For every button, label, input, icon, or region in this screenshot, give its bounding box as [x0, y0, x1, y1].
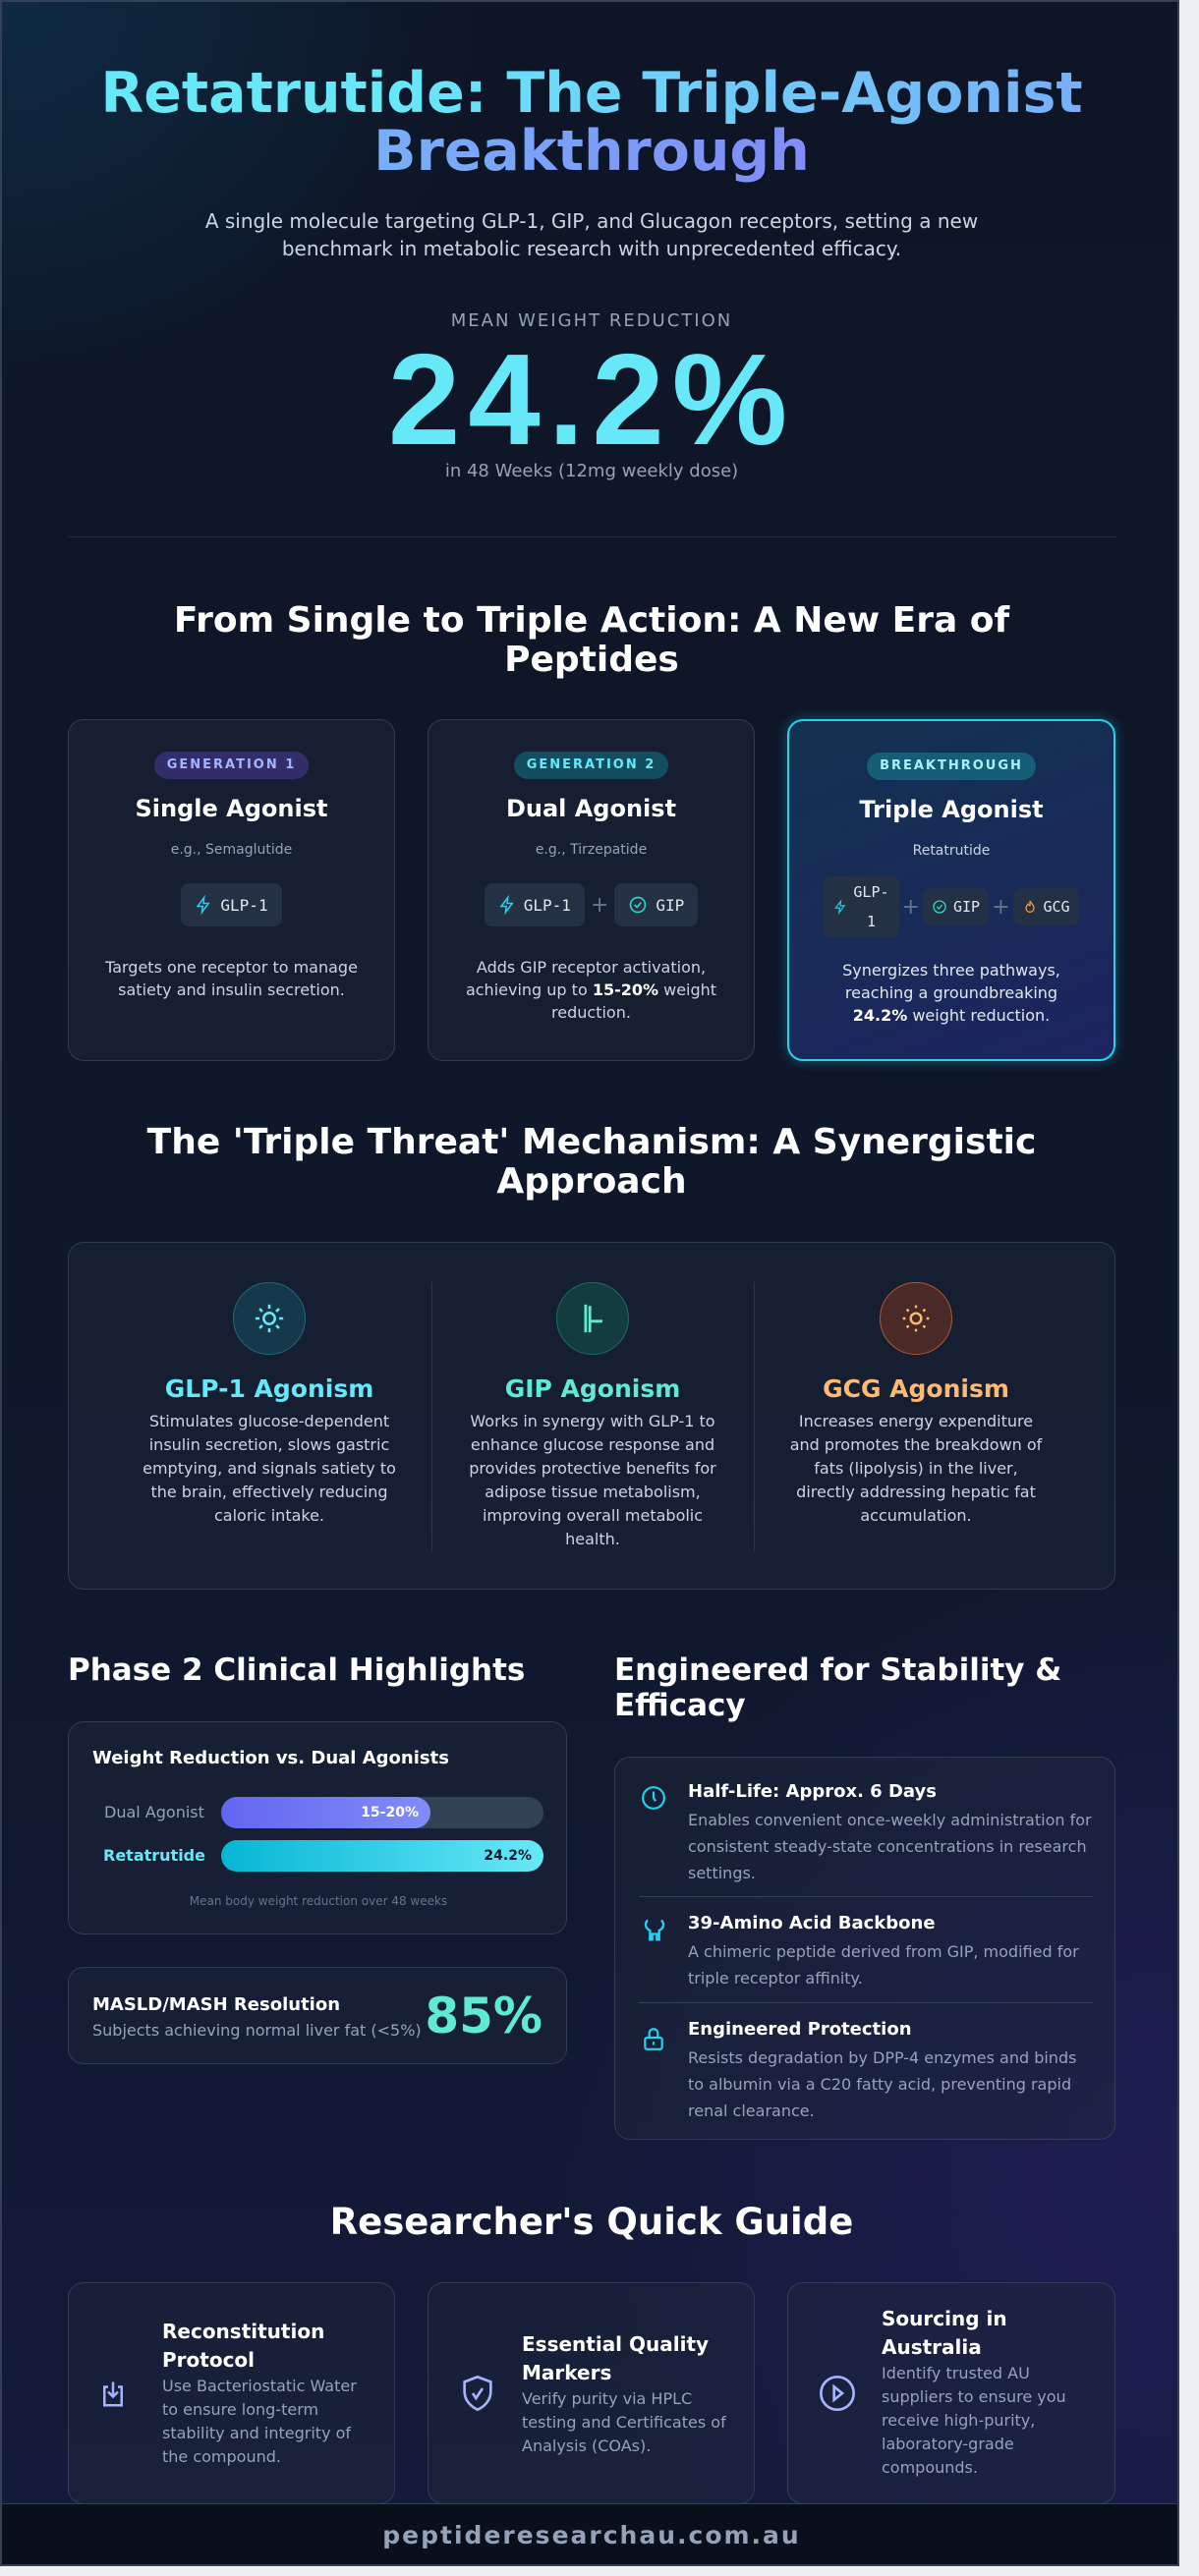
column: GCG agonism: [790, 1282, 1043, 1525]
card: generation 2: Dual Agonist: [506, 795, 676, 822]
heading: single to triple: From Single to Triple Action: A New Era of Peptides: [174, 600, 1009, 680]
icon: shield: [463, 2376, 492, 2411]
chart card: weight reduction: [68, 1721, 567, 1934]
icon: download: [103, 2381, 123, 2407]
card: generation 1: GLP-1: [220, 896, 268, 914]
icon: glp-1: [233, 1282, 306, 1355]
guide card: sourcing: Sourcing in Australia: [882, 2307, 1007, 2359]
guide card: quality: [428, 2282, 755, 2504]
guide card: quality: Verify purity via HPLC testing and Certificates of Analysis (COAs).: [522, 2389, 726, 2455]
column: GIP agonism: [469, 1282, 716, 1548]
bar: retatrutide: Retatrutide: [103, 1846, 205, 1865]
item: backbone: A chimeric peptide derived from GIP, modified for triple receptor affinity.: [688, 1942, 1079, 1988]
stat card: MASLD: Subjects achieving normal liver fat (<5%): [92, 2021, 422, 2040]
bar: dual agonist: [104, 1797, 543, 1828]
bar: dual agonist: 15-20%: [361, 1805, 419, 1820]
card: generation 1: e.g., Semaglutide: [171, 842, 292, 858]
stat card: MASLD: [68, 1967, 567, 2064]
panel: engineered features: [614, 1757, 1115, 2140]
heading: phase 2: Phase 2 Clinical Highlights: [68, 1652, 525, 1688]
item: backbone: 39-Amino Acid Backbone: [688, 1913, 936, 1933]
column: GLP-1 agonism: [143, 1282, 396, 1525]
card: generation 2: GIP: [656, 896, 684, 914]
icon: gip: [556, 1282, 629, 1355]
heading: quick guide: Researcher's Quick Guide: [330, 2201, 853, 2243]
guide card: sourcing: Identify trusted AU suppliers to ensure you receive high-purity, laboratory-grade compounds.: [882, 2364, 1066, 2477]
item: protection: Resists degradation by DPP-4 enzymes and binds to albumin via a C20 fatty acid, preventing rapid renal clearance.: [688, 2048, 1076, 2120]
bar: retatrutide: 24.2%: [484, 1848, 532, 1864]
column: GCG agonism: Increases energy expenditure and promotes the breakdown of fats (lipolysis) in the liver, directly addressing hepatic fat accumulation.: [790, 1412, 1042, 1525]
panel: mechanism: [68, 1242, 1115, 1590]
title: Retatrutide: The Triple-Agonist: [100, 61, 1083, 126]
column: GIP agonism: GIP Agonism: [505, 1374, 680, 1403]
item: backbone: [645, 1913, 1079, 1988]
card: generation 1: GENERATION 1: [167, 757, 296, 772]
card: generation 1: Single Agonist: [136, 795, 327, 822]
icon: play: [820, 2376, 855, 2411]
card: generation 2: Adds GIP receptor activation, achieving up to 15-20% weight reduction.: [466, 958, 716, 1022]
guide card: reconstitution: Use Bacteriostatic Water to ensure long-term stability and integrity of the compound.: [162, 2377, 357, 2466]
title: Breakthrough: [373, 119, 810, 184]
card: breakthrough: GLP-: [853, 883, 889, 901]
card: breakthrough: GIP: [953, 898, 980, 916]
subtitle: A single molecule targeting GLP-1, GIP, and Glucagon receptors, setting a new benchmark in metabolic research with unprecedented efficacy.: [205, 209, 978, 260]
card: generation 2: +: [591, 892, 608, 918]
card: generation 1: [68, 719, 395, 1061]
bar: retatrutide: [103, 1840, 543, 1872]
guide card: quality: Essential Quality Markers: [522, 2332, 709, 2384]
stat card: MASLD: 85%: [425, 1988, 542, 2044]
item: half-life: Enables convenient once-weekly administration for consistent steady-state concentrations in research settings.: [688, 1811, 1092, 1882]
card: generation 2: GENERATION 2: [527, 757, 656, 772]
item: protection: Engineered Protection: [688, 2019, 912, 2040]
guide card: reconstitution: Reconstitution Protocol: [162, 2320, 324, 2372]
item: half-life: [642, 1781, 1092, 1882]
footer: peptideresearchau.com.au: [382, 2521, 801, 2549]
card: breakthrough: GCG: [1044, 898, 1070, 916]
guide card: reconstitution: [68, 2282, 395, 2504]
footer: [2, 2503, 1181, 2568]
card: breakthrough: Retatrutide: [913, 843, 990, 859]
column: GLP-1 agonism: GLP-1 Agonism: [165, 1374, 373, 1403]
column: GLP-1 agonism: Stimulates glucose-dependent insulin secretion, slows gastric emptying, and signals satiety to the brain, effectively reducing caloric intake.: [143, 1412, 396, 1525]
icon: gcg: [880, 1282, 952, 1355]
hero stat: in 48 Weeks (12mg weekly dose): [445, 461, 738, 481]
card: generation 1: Targets one receptor to manage satiety and insulin secretion.: [105, 958, 358, 999]
bar: dual agonist: Dual Agonist: [104, 1803, 204, 1821]
card: breakthrough: +: [992, 894, 1010, 920]
chart card: weight reduction: Weight Reduction vs. Dual Agonists: [92, 1748, 449, 1768]
card: generation 2: e.g., Tirzepatide: [536, 842, 647, 858]
item: half-life: Half-Life: Approx. 6 Days: [688, 1781, 937, 1802]
item: protection: [644, 2019, 1076, 2120]
column: GIP agonism: Works in synergy with GLP-1 to enhance glucose response and provides protective benefits for adipose tissue metabolism, improving overall metabolic health.: [469, 1412, 716, 1548]
stat card: MASLD: MASLD/MASH Resolution: [92, 1994, 340, 2015]
card: breakthrough: 1: [867, 913, 876, 930]
card: breakthrough: +: [902, 894, 920, 920]
card: generation 2: GLP-1: [524, 896, 571, 914]
card: breakthrough: BREAKTHROUGH: [880, 758, 1023, 773]
title: [100, 61, 1083, 184]
column: GCG agonism: GCG Agonism: [823, 1374, 1009, 1403]
heading: mechanism: The 'Triple Threat' Mechanism: A Synergistic Approach: [147, 1122, 1036, 1202]
chart card: weight reduction: Mean body weight reduction over 48 weeks: [190, 1894, 447, 1908]
card: generation 2: [428, 719, 755, 1061]
hero stat: MEAN WEIGHT REDUCTION: [451, 310, 732, 331]
heading: engineered: Engineered for Stability & Efficacy: [614, 1652, 1061, 1723]
card: breakthrough: [787, 719, 1115, 1061]
card: breakthrough: Synergizes three pathways, reaching a groundbreaking 24.2% weight reduction.: [842, 961, 1060, 1025]
guide card: sourcing: [787, 2282, 1115, 2504]
card: breakthrough: Triple Agonist: [859, 796, 1044, 823]
hero stat: 24.2%: [388, 327, 795, 472]
